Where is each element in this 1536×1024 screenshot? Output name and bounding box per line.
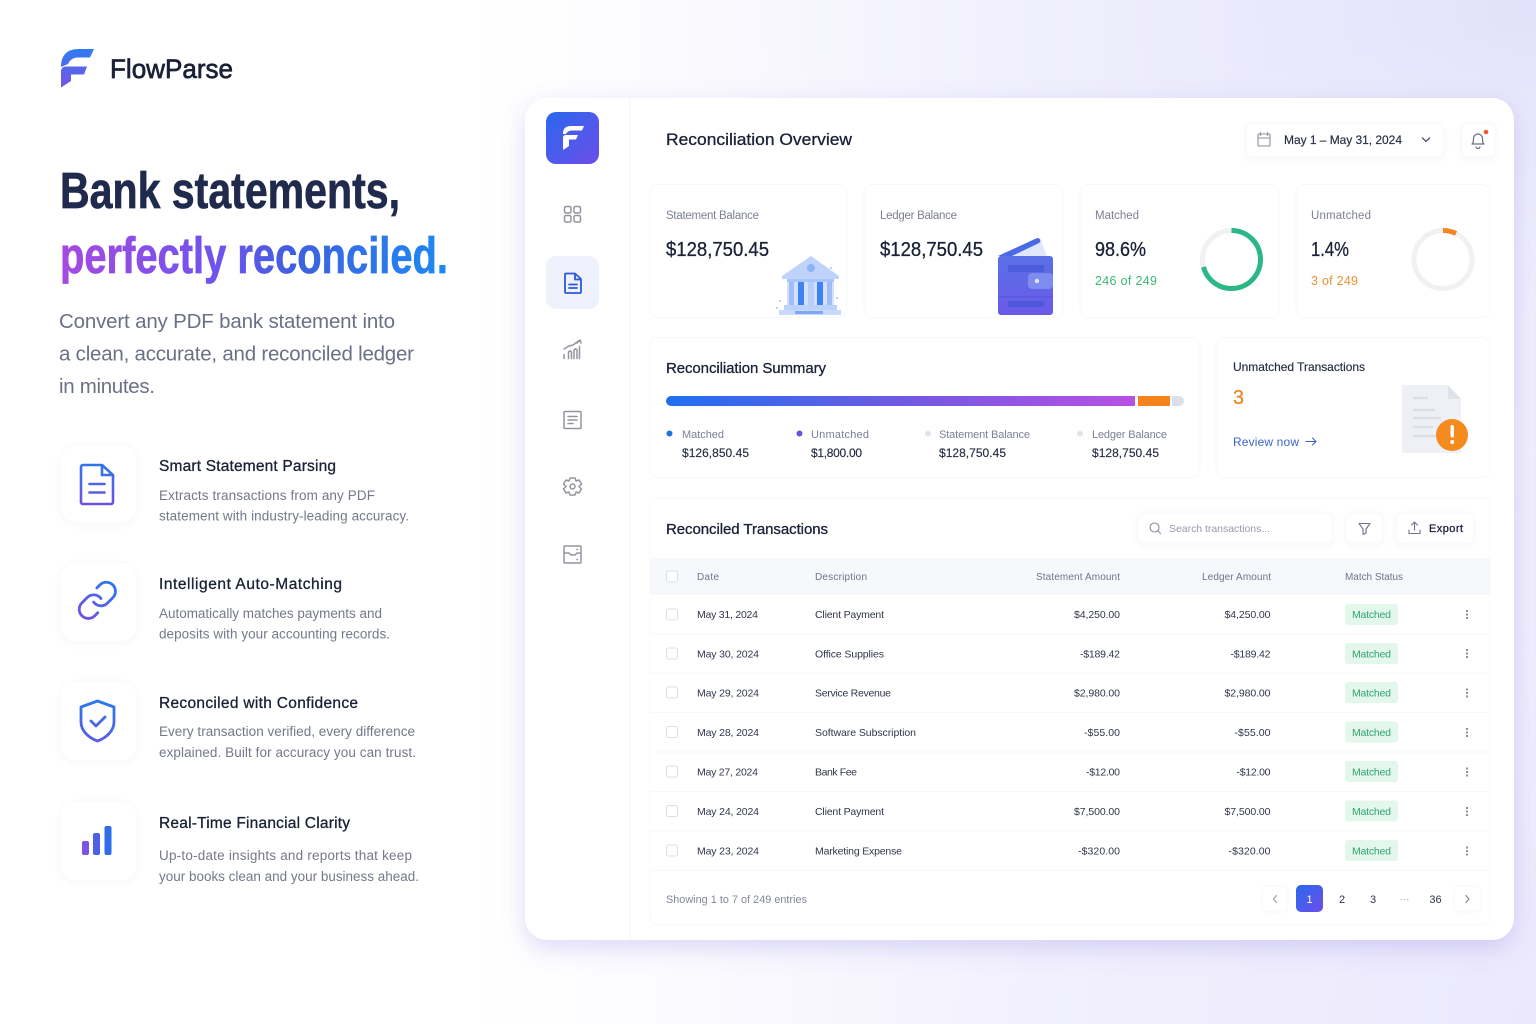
table row 2: -$189.42 [1080, 648, 1120, 660]
table row 3: $2,980.00 [1074, 688, 1120, 700]
table row 3: $2,980.00 [1224, 688, 1271, 700]
stacked progress bar [666, 396, 1184, 406]
icon: active document tab [546, 256, 599, 309]
pagination [1262, 885, 1481, 912]
intro paragraph: a clean, accurate, and reconciled ledger [59, 342, 414, 366]
feature: Intelligent Auto-Matching [60, 562, 390, 642]
icon tile: document [60, 444, 137, 523]
feature: Real-Time Financial Clarity [60, 801, 419, 884]
feature text [159, 458, 409, 524]
icon: app logo tile [546, 112, 599, 164]
table row 7: Matched [1352, 846, 1391, 858]
table row 5 [650, 752, 1490, 782]
feature text: statement with industry-leading accuracy. [159, 508, 409, 524]
legend: ledger balance [1077, 429, 1167, 460]
feature text: your books clean and your business ahead. [159, 869, 419, 884]
filter button [1346, 513, 1383, 544]
card: matched [1080, 184, 1279, 318]
card: matched: 246 of 249 [1095, 274, 1157, 288]
brand name: FlowParse [110, 54, 233, 84]
table header: Date [697, 572, 719, 583]
card: unmatched [1296, 184, 1490, 318]
headline: Bank statements, [60, 162, 400, 219]
icon: settings gear [564, 478, 582, 495]
card: matched: Matched [1095, 210, 1139, 222]
pagination: ··· [1400, 894, 1410, 905]
card: ledger balance: Ledger Balance [880, 210, 957, 222]
table row 5: Matched [1352, 766, 1391, 778]
legend: matched: Matched [682, 429, 724, 441]
card: unmatched: 3 of 249 [1311, 274, 1358, 288]
feature text [159, 695, 416, 760]
export button: Export [1429, 523, 1463, 535]
donut chart: unmatched [1414, 230, 1472, 288]
table row 2: -$189.42 [1230, 648, 1271, 660]
sidebar [546, 112, 599, 563]
feature text: Smart Statement Parsing [159, 458, 336, 475]
table header [650, 558, 1490, 595]
table row 1: Client Payment [815, 609, 884, 621]
card: statement balance: $128,750.45 [666, 239, 769, 261]
table row 7: May 23, 2024 [697, 846, 759, 858]
panel: reconciled transactions table [650, 498, 1490, 925]
table row 6 [650, 792, 1490, 822]
legend: statement balance [925, 429, 1030, 460]
search box [1138, 513, 1333, 544]
headline: perfectly reconciled. [60, 227, 448, 284]
table row 6: Client Payment [815, 806, 884, 818]
legend: ledger balance: Ledger Balance [1092, 429, 1167, 441]
brand logo and name [61, 49, 233, 88]
table row 6: Matched [1352, 806, 1391, 818]
icon: storage [564, 546, 581, 563]
feature text: explained. Built for accuracy you can trust. [159, 745, 416, 760]
feature: Reconciled with Confidence [60, 681, 416, 761]
table row 4: Matched [1352, 727, 1391, 739]
icon: calendar [1258, 132, 1270, 146]
pagination: 36 [1429, 894, 1442, 906]
card: unmatched: 1.4% [1311, 239, 1349, 261]
link: review now: Review now [1233, 435, 1299, 449]
feature text: Automatically matches payments and [159, 606, 382, 621]
legend: unmatched: $1,800.00 [811, 446, 862, 460]
legend: statement balance: Statement Balance [939, 429, 1030, 441]
icon: chevron [1422, 138, 1430, 142]
table row 1: May 31, 2024 [697, 609, 758, 621]
panel: unmatched transactions: 3 [1233, 387, 1244, 409]
table row 2: May 30, 2024 [697, 648, 759, 660]
table row 2 [650, 634, 1490, 664]
table row 3 [650, 673, 1490, 703]
legend: unmatched: Unmatched [811, 429, 869, 441]
table header: Statement Amount [1036, 572, 1120, 583]
table row 7 [650, 831, 1490, 870]
table row 4 [650, 712, 1490, 742]
panel: reconciled transactions table: Reconciled Transactions [666, 521, 828, 538]
table row 5: -$12.00 [1086, 766, 1120, 778]
feature text: Intelligent Auto-Matching [159, 576, 342, 593]
date text: May 1 – May 31, 2024 [1284, 133, 1402, 147]
pagination: 2 [1339, 894, 1345, 906]
legend: matched: $126,850.45 [682, 446, 749, 460]
table header: Ledger Amount [1202, 572, 1271, 583]
table row 1: Matched [1352, 609, 1391, 621]
illustration: document with alert [1402, 385, 1468, 453]
table row 1: $4,250.00 [1224, 609, 1271, 621]
table row 7: -$320.00 [1078, 846, 1120, 858]
table row 6: May 24, 2024 [697, 806, 759, 818]
table row 4: -$55.00 [1234, 727, 1271, 739]
icon: analytics [564, 340, 581, 358]
table row 2: Matched [1352, 648, 1391, 660]
intro paragraph: in minutes. [59, 375, 155, 398]
table row 4: May 28, 2024 [697, 727, 759, 739]
table row 6: $7,500.00 [1224, 806, 1271, 818]
date range picker [1246, 123, 1444, 157]
table row 6: $7,500.00 [1074, 806, 1120, 818]
table row 7: -$320.00 [1228, 846, 1271, 858]
notification bell [1461, 123, 1496, 157]
legend: unmatched [796, 429, 869, 460]
table row 5: -$12.00 [1236, 766, 1271, 778]
legend: matched [666, 429, 749, 460]
table row 7: Marketing Expense [815, 846, 902, 858]
illustration: bank building [776, 256, 841, 315]
table row 5: Bank Fee [815, 766, 857, 778]
table row 2: Office Supplies [815, 648, 884, 660]
headline [60, 162, 448, 284]
table row 4: Software Subscription [815, 727, 916, 739]
table row 4: -$55.00 [1084, 727, 1120, 739]
icon: report [564, 412, 581, 428]
illustration: wallet [998, 238, 1053, 315]
feature: Smart Statement Parsing [60, 444, 409, 524]
icon tile: shield check [60, 681, 137, 761]
card: statement balance: Statement Balance [666, 210, 759, 222]
panel: unmatched transactions: Unmatched Transactions [1233, 360, 1365, 374]
card: ledger balance: $128,750.45 [880, 239, 983, 261]
feature text: Every transaction verified, every difference [159, 724, 415, 739]
legend: ledger balance: $128,750.45 [1092, 446, 1159, 460]
feature text: Reconciled with Confidence [159, 695, 358, 712]
pagination: 3 [1370, 894, 1376, 906]
search box: Search transactions... [1169, 523, 1270, 535]
feature text: deposits with your accounting records. [159, 626, 390, 642]
panel: unmatched transactions [1216, 338, 1490, 478]
export button [1396, 513, 1474, 544]
icon tile: bar chart [60, 801, 137, 881]
feature text: Up-to-date insights and reports that keep [159, 848, 412, 863]
pagination: 1 [1306, 894, 1313, 906]
dashboard panel [525, 98, 1514, 940]
donut chart: matched [1202, 230, 1261, 288]
intro paragraph: Convert any PDF bank statement into [59, 310, 395, 333]
feature text: Extracts transactions from any PDF [159, 488, 375, 503]
entries count: Showing 1 to 7 of 249 entries [666, 894, 808, 906]
panel: reconciliation summary: Reconciliation Summary [666, 360, 826, 377]
table row 1 [666, 604, 1468, 625]
table row 3: May 29, 2024 [697, 688, 759, 700]
table row 5: May 27, 2024 [697, 766, 758, 778]
table header: Match Status [1345, 572, 1403, 583]
legend: statement balance: $128,750.45 [939, 446, 1006, 460]
panel: reconciliation summary [666, 362, 1184, 459]
feature text [159, 576, 390, 642]
intro paragraph [59, 310, 414, 398]
feature text [159, 815, 419, 884]
table header: Description [815, 572, 867, 583]
table row 3: Service Revenue [815, 688, 891, 700]
table row 3: Matched [1352, 688, 1391, 700]
icon tile: chain link [60, 562, 137, 642]
card: unmatched: Unmatched [1311, 210, 1371, 222]
card: matched: 98.6% [1095, 239, 1146, 261]
table row 1: $4,250.00 [1074, 609, 1120, 621]
icon: dashboard grid [564, 206, 580, 222]
dashboard heading: Reconciliation Overview [666, 130, 853, 149]
icon: FlowParse F mark [61, 49, 94, 88]
card: ledger balance [864, 184, 1063, 318]
card: statement balance [650, 184, 847, 318]
feature text: Real-Time Financial Clarity [159, 815, 350, 832]
